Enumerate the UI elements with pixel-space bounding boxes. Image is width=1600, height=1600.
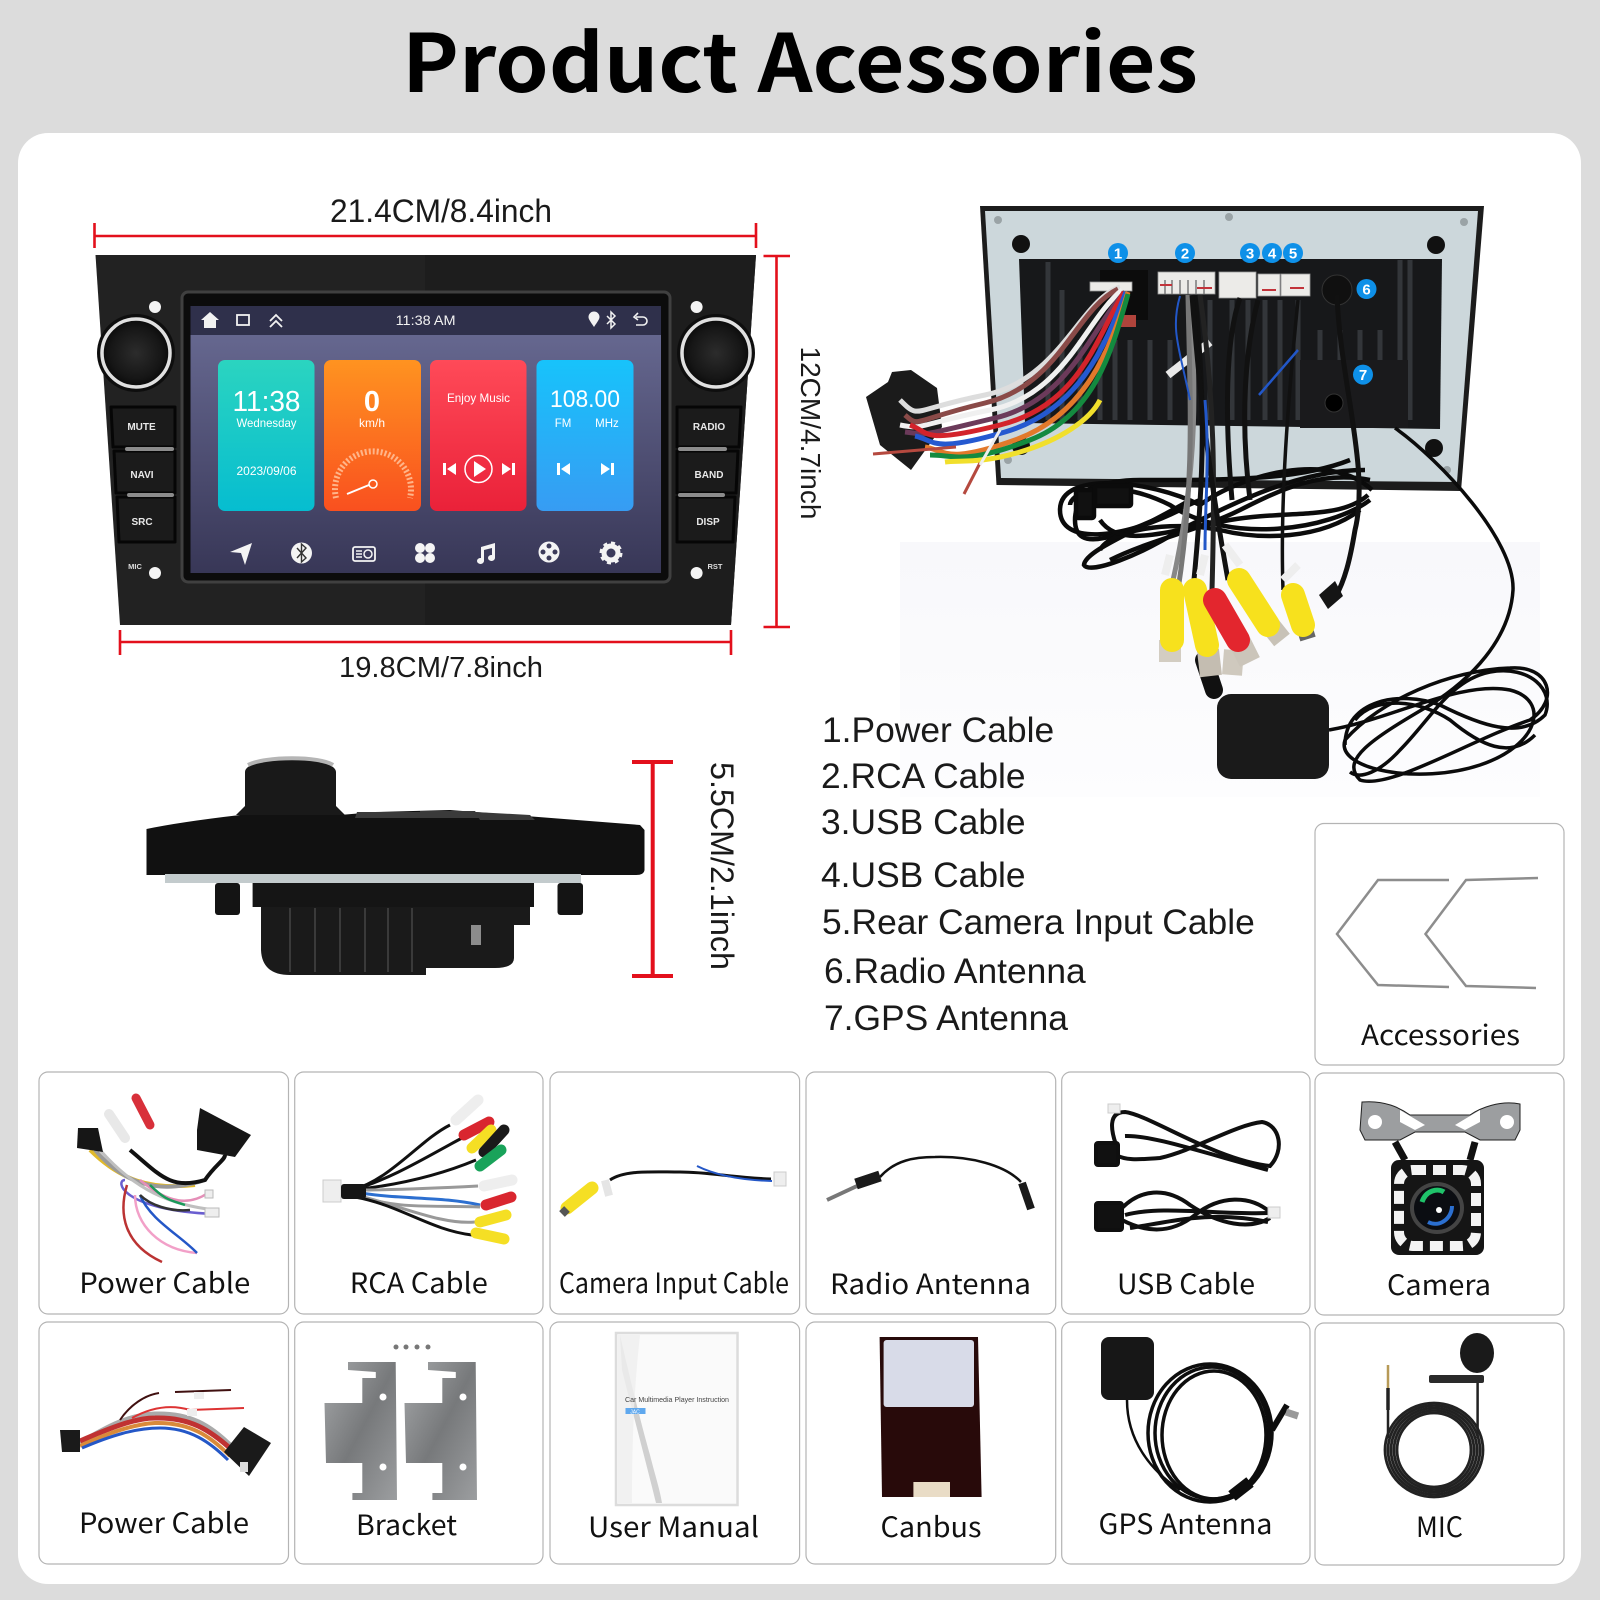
panel: user manual xyxy=(550,1322,800,1564)
buttons: left: MUTE xyxy=(127,422,156,433)
icon: left bracket xyxy=(324,1362,397,1500)
panel: RCA cable: RCA Cable xyxy=(350,1262,488,1302)
app card: radio: MHz xyxy=(595,418,619,430)
panel: radio antenna: Radio Antenna xyxy=(830,1263,1031,1303)
knob: right xyxy=(677,314,755,392)
panel: USB cable xyxy=(1062,1072,1310,1314)
dimension: bottom width xyxy=(120,630,731,684)
cable tie xyxy=(1168,342,1210,375)
dimension: depth xyxy=(632,762,740,976)
buttons: right: BAND xyxy=(695,470,723,481)
dimension: right height: 12CM/4.7inch xyxy=(795,346,826,520)
icon: harness xyxy=(77,1098,251,1262)
app card: radio: 108.00 xyxy=(550,386,620,413)
port number badges: 5 xyxy=(1289,246,1297,262)
app card: music: Enjoy Music xyxy=(447,391,510,405)
rear housing xyxy=(980,206,1484,491)
knob: left xyxy=(97,314,175,392)
dimension: bottom width: 19.8CM/7.8inch xyxy=(339,652,543,684)
mounting dots xyxy=(149,301,703,579)
black cable loops xyxy=(1060,460,1372,568)
numbered cable list: 4.USB Cable xyxy=(821,855,1026,895)
icon: removal tools xyxy=(1337,878,1538,988)
app card: radio: FM xyxy=(555,418,571,430)
heatsink module xyxy=(1019,259,1442,429)
panel: power cable: Power Cable xyxy=(79,1502,249,1542)
icon: manual booklet: Car Multimedia Player Instruction xyxy=(625,1395,729,1404)
panel: camera xyxy=(1315,1073,1564,1315)
buttons: left: NAVI xyxy=(130,470,154,481)
buttons: left xyxy=(111,407,175,571)
numbered cable list: 6.Radio Antenna xyxy=(824,951,1086,991)
app card: radio xyxy=(536,360,634,511)
faceplate xyxy=(96,255,756,625)
app card: music xyxy=(430,360,526,511)
app card: clock: Wednesday xyxy=(236,416,296,430)
side view of unit xyxy=(146,758,644,975)
icon: harness xyxy=(60,1390,271,1476)
power harness xyxy=(866,287,1128,494)
front head unit xyxy=(96,255,756,625)
icon: right bracket xyxy=(404,1362,477,1500)
rear housing heatsink xyxy=(253,883,534,907)
port number badges: 1 xyxy=(1114,246,1122,262)
panel: USB cable: USB Cable xyxy=(1117,1263,1255,1303)
panel: canbus: Canbus xyxy=(880,1506,982,1546)
buttons: right: RST xyxy=(708,562,723,571)
numbered cable list xyxy=(821,710,1255,1038)
buttons: left: SRC xyxy=(131,517,153,528)
panel: power cable with canbus connector xyxy=(39,1072,288,1314)
panel: accessories: Accessories xyxy=(1361,1014,1520,1054)
numbered cable list: 1.Power Cable xyxy=(822,710,1054,750)
icon: reversing camera xyxy=(1360,1102,1520,1255)
panel: power cable xyxy=(39,1322,288,1564)
panel: power cable with canbus connector: Power Cable xyxy=(79,1262,250,1302)
RCA plugs xyxy=(1165,545,1343,690)
panel: GPS antenna xyxy=(1062,1322,1310,1564)
icon: manual booklet xyxy=(616,1333,738,1505)
numbered cable list: 5.Rear Camera Input Cable xyxy=(822,902,1255,942)
mounting studs xyxy=(1012,235,1445,457)
app card: speed xyxy=(324,360,421,511)
panel: GPS antenna: GPS Antenna xyxy=(1098,1503,1272,1543)
buttons: right: RADIO xyxy=(693,422,725,433)
panel: bracket xyxy=(295,1322,543,1564)
icon: camera cable xyxy=(562,1166,786,1214)
icon: canbus box xyxy=(880,1337,982,1497)
screen xyxy=(190,306,661,573)
port number badges xyxy=(1108,243,1376,385)
numbered cable list: 7.GPS Antenna xyxy=(824,998,1068,1038)
screen bezel xyxy=(182,292,670,582)
rear view photo with cables xyxy=(866,206,1547,797)
status bar xyxy=(190,306,661,335)
rotary knob xyxy=(236,759,345,815)
connector blocks xyxy=(1090,272,1310,298)
panel: microphone xyxy=(1315,1323,1564,1565)
plate screws xyxy=(994,213,1468,474)
title: Product Acessories xyxy=(402,0,1198,116)
app card: speed: km/h xyxy=(359,416,385,430)
icon: RCA fan-out xyxy=(323,1100,512,1239)
side body xyxy=(146,810,644,875)
dimension: top width xyxy=(94,193,756,248)
panel: user manual: User Manual xyxy=(588,1506,759,1546)
panel: camera input cable xyxy=(550,1072,800,1314)
buttons: right xyxy=(677,407,741,571)
panel: RCA cable xyxy=(295,1072,543,1314)
port number badges: 2 xyxy=(1181,246,1189,262)
dimension: depth: 5.5CM/2.1inch xyxy=(704,762,740,970)
panel: canbus xyxy=(806,1322,1056,1564)
port number badges: 4 xyxy=(1268,246,1277,262)
icon: manual booklet: JAC xyxy=(630,1410,640,1416)
port number badges: 6 xyxy=(1362,282,1371,298)
mounting plate xyxy=(165,874,581,883)
dimension: top width: 21.4CM/8.4inch xyxy=(330,193,552,229)
floor shade xyxy=(900,542,1540,797)
buttons: left: MIC xyxy=(128,562,142,571)
app card: clock xyxy=(218,360,314,511)
panel: radio antenna xyxy=(806,1072,1056,1314)
GPS antenna xyxy=(1217,428,1547,781)
panel: camera input cable: Camera Input Cable xyxy=(559,1262,789,1302)
panel: accessories xyxy=(1315,824,1564,1065)
dock icons xyxy=(230,542,621,565)
port number badges: 3 xyxy=(1246,246,1254,262)
numbered cable list: 2.RCA Cable xyxy=(821,756,1026,796)
port number badges: 7 xyxy=(1359,367,1367,384)
icon: antenna cable xyxy=(827,1157,1031,1209)
icon: USB cables xyxy=(1096,1104,1280,1230)
icon: screws xyxy=(394,1344,430,1350)
standoffs xyxy=(215,883,240,915)
numbered cable list: 3.USB Cable xyxy=(821,802,1026,842)
dimension: right height xyxy=(764,256,826,627)
icon: lapel mic xyxy=(1385,1333,1494,1497)
panel: camera: Camera xyxy=(1387,1264,1491,1304)
panel: bracket: Bracket xyxy=(356,1504,457,1544)
app card: clock: 2023/09/06 xyxy=(236,466,296,478)
icon: GPS puck and cable xyxy=(1101,1337,1298,1502)
panel: microphone: MIC xyxy=(1416,1506,1463,1546)
buttons: right: DISP xyxy=(696,517,720,528)
status bar: 11:38 AM xyxy=(396,312,456,328)
RCA and USB wires xyxy=(1172,295,1359,598)
app card: speed: 0 xyxy=(364,386,380,418)
app card: clock: 11:38 xyxy=(232,386,300,418)
